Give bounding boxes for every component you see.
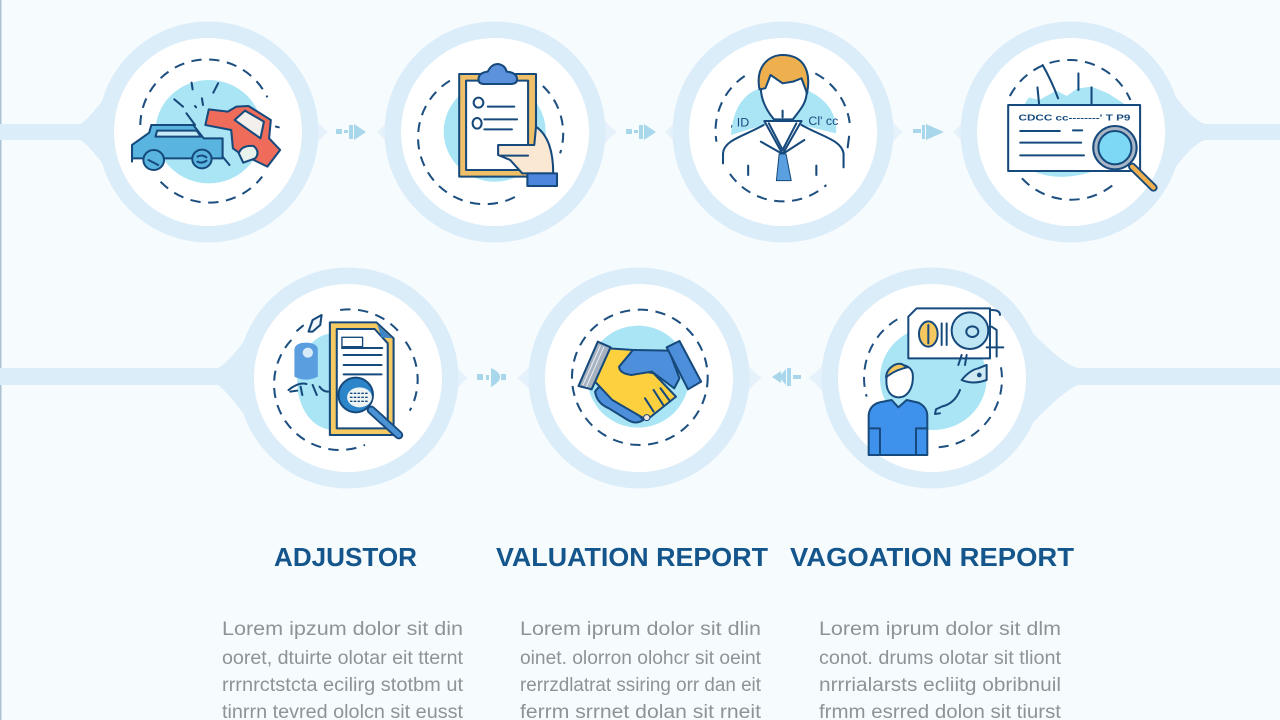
ring [953, 30, 1173, 234]
icon: person with board [864, 308, 1003, 455]
text block: adjustor description: rrrnrctstcta ecilirg stotbm ut [222, 675, 464, 696]
arrow 6 [772, 368, 801, 386]
icon: document with magnifier [1008, 60, 1154, 200]
heading: valuation report: VALUATION REPORT [496, 542, 768, 572]
text block: vagoation description: conot. drums olotar sit tliont [819, 648, 1062, 669]
arrow 5 [477, 368, 506, 387]
arrow 1 [336, 124, 366, 140]
heading: adjustor: ADJUSTOR [274, 542, 417, 572]
icon: clipboard in hand [418, 64, 563, 204]
icon: car crash [132, 59, 280, 203]
arrow 2 [626, 124, 656, 140]
connector: top row right bar [1156, 70, 1280, 194]
ring [665, 30, 903, 234]
connector: bottom row left bar [0, 318, 262, 438]
ring [246, 276, 468, 480]
text block: valuation description: rerrzdlatrat ssiring orr dan eit [520, 675, 762, 696]
step 6: handshake [517, 276, 762, 480]
text block: valuation description: Lorem iprum dolor sit dlin [520, 619, 761, 640]
heading: vagoation report: VAGOATION REPORT [790, 542, 1074, 572]
step 4: document check [953, 30, 1173, 234]
step 3: adjustor person [665, 30, 903, 234]
text block: adjustor description: ooret, dtuirte olotar eit tternt [222, 648, 464, 669]
step 2: clipboard [377, 30, 617, 234]
connector: bottom row right bar [1017, 316, 1280, 440]
icon: handshake [572, 310, 708, 445]
step 5: inspection document [246, 276, 468, 480]
icon: person in suit: , ID [730, 116, 749, 130]
step 7: vagoation person and board [808, 276, 1034, 480]
icon: document with magnifier: CDCC cc--------' T P9 [1019, 113, 1131, 123]
text block: vagoation description: Lorem iprum dolor sit dlm [819, 619, 1061, 640]
icon: person in suit [716, 55, 850, 201]
text block: vagoation description: nrrrialarsts ecliitg obribnuil [819, 675, 1061, 696]
text block: adjustor description [222, 619, 464, 720]
icon: person in suit: Cl' cc [808, 114, 838, 128]
connector: top row left bar [0, 72, 123, 192]
ring [808, 276, 1034, 480]
ring [517, 276, 762, 480]
text block: valuation description: oinet. olorron olohcr sit oeint [520, 648, 762, 669]
icon: document and magnifier [274, 309, 418, 450]
ring [106, 30, 328, 234]
text block: valuation description [520, 619, 762, 720]
text block: vagoation description [819, 619, 1062, 720]
step 1: car crash [106, 30, 328, 234]
text block: adjustor description: Lorem ipzum dolor sit din [222, 619, 463, 640]
ring [377, 30, 617, 234]
arrow 3 [913, 124, 944, 140]
